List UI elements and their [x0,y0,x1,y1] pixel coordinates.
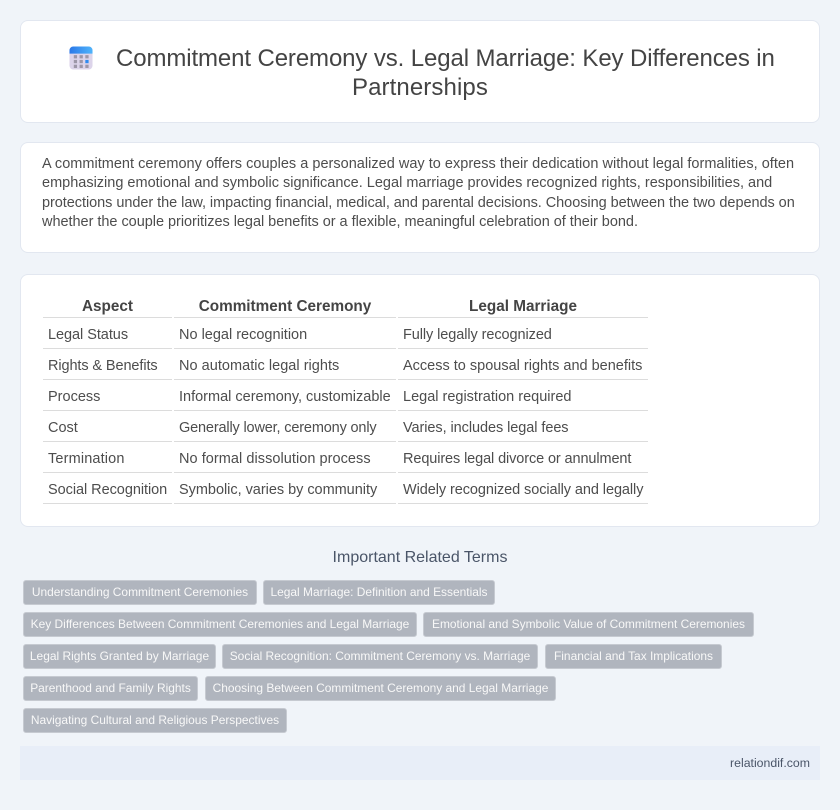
comparison table: Legal Status [48,327,128,343]
title [116,45,775,101]
panel: comparison table [20,274,820,527]
comparison table: Varies, includes legal fees [403,420,568,436]
tag list: related terms: Choosing Between Commitment Ceremony and Legal Marriage [213,681,548,695]
tag list: related terms: Social Recognition: Commitment Ceremony vs. Marriage [230,649,530,663]
heading: related terms: Important Related Terms [333,549,507,566]
comparison table: Generally lower, ceremony only [179,420,376,436]
tag list: related terms: Key Differences Between Commitment Ceremonies and Legal Marriage [31,617,409,631]
tag list: related terms: Legal Marriage: Definition and Essentials [270,585,488,599]
text: intro paragraph: emphasizing emotional and symbolic significance. Legal marriage provides recognized rights, responsibilities, and [42,175,772,191]
comparison table: Commitment Ceremony [199,298,371,315]
tag list: related terms: Understanding Commitment Ceremonies [32,585,248,599]
comparison table: Termination [48,451,125,467]
text: intro paragraph: whether the couple prioritizes legal benefits or a flexible, meaningful celebration of their bond. [42,214,638,230]
comparison table: No formal dissolution process [179,451,371,467]
panel: header [20,20,820,123]
tag list: related terms: Parenthood and Family Rights [30,681,191,695]
comparison table: Rights & Benefits [48,358,158,374]
comparison table: Symbolic, varies by community [179,482,377,498]
icon: calendar [69,46,92,70]
comparison table: Legal Marriage [469,298,577,315]
tag list: related terms: Financial and Tax Implications [554,649,713,663]
comparison table: Widely recognized socially and legally [403,482,643,498]
title: Commitment Ceremony vs. Legal Marriage: Key Differences in [116,45,775,72]
comparison table: Access to spousal rights and benefits [403,358,642,374]
comparison table: Informal ceremony, customizable [179,389,391,405]
comparison table: Cost [48,420,78,436]
comparison table: Aspect [82,298,133,315]
tag list: related terms: Emotional and Symbolic Value of Commitment Ceremonies [432,617,745,631]
comparison table: Social Recognition [48,482,167,498]
comparison table: No legal recognition [179,327,307,343]
comparison table [43,298,648,504]
comparison table: Requires legal divorce or annulment [403,451,631,467]
comparison table: Legal registration required [403,389,571,405]
text: intro paragraph [42,156,795,230]
title: Partnerships [352,74,488,101]
comparison table: No automatic legal rights [179,358,339,374]
panel: intro paragraph [20,142,820,253]
tag list: related terms: Navigating Cultural and Religious Perspectives [31,713,279,727]
footer: source [20,746,820,780]
comparison table: Fully legally recognized [403,327,552,343]
text: intro paragraph: A commitment ceremony offers couples a personalized way to express their dedication without legal formalities, often [42,156,794,172]
text: intro paragraph: protections under the law, impacting financial, medical, and parental decisions. Choosing between the two depends on [42,195,795,211]
tag list: related terms: Legal Rights Granted by Marriage [30,649,209,663]
comparison table: Process [48,389,100,405]
footer: source: relationdif.com [730,756,810,770]
tag list: related terms [23,580,754,733]
